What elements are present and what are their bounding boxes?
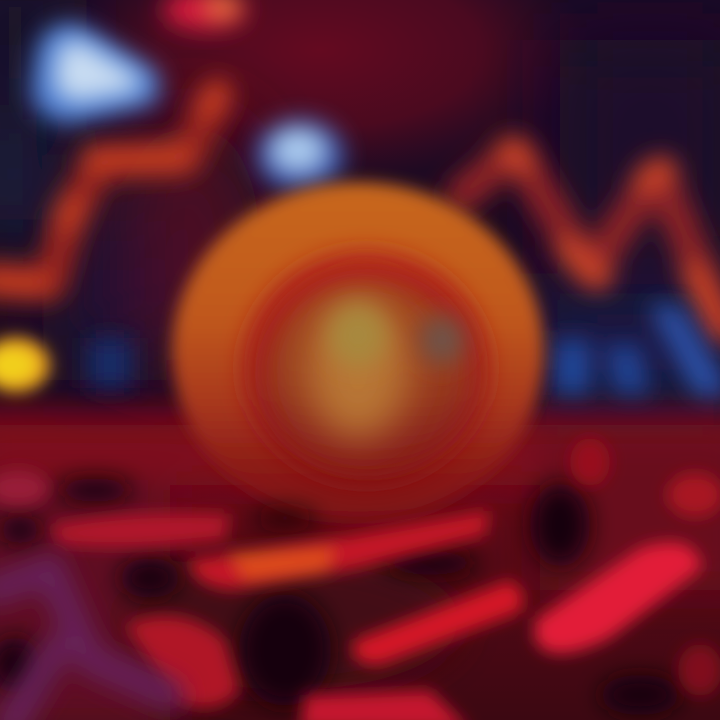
- floor band: [0, 425, 720, 720]
- line chart: left rising trend: [0, 92, 218, 284]
- background glow: red haze top centre: [50, 0, 590, 180]
- floor shapes: bright red streaks: [0, 438, 720, 720]
- coin inner ring: [244, 252, 488, 484]
- coin: [172, 182, 544, 522]
- floor shape: purple branching lower left: [0, 570, 170, 720]
- icon: pale blue shape centre: [256, 119, 344, 191]
- blue bar left: [88, 338, 132, 388]
- blue bars lower right: [555, 305, 720, 400]
- coin centre emblem: [306, 300, 410, 440]
- icon: yellow shape left: [0, 337, 50, 393]
- coin inner field: [266, 280, 470, 472]
- background glow: [0, 0, 720, 400]
- line chart: right zigzag trend: [462, 150, 720, 330]
- top red glow: [163, 0, 247, 30]
- coin emblem highlights: [328, 303, 464, 367]
- dark gaps in floor: [0, 478, 680, 715]
- icon: pale blue shape upper left: [30, 23, 161, 124]
